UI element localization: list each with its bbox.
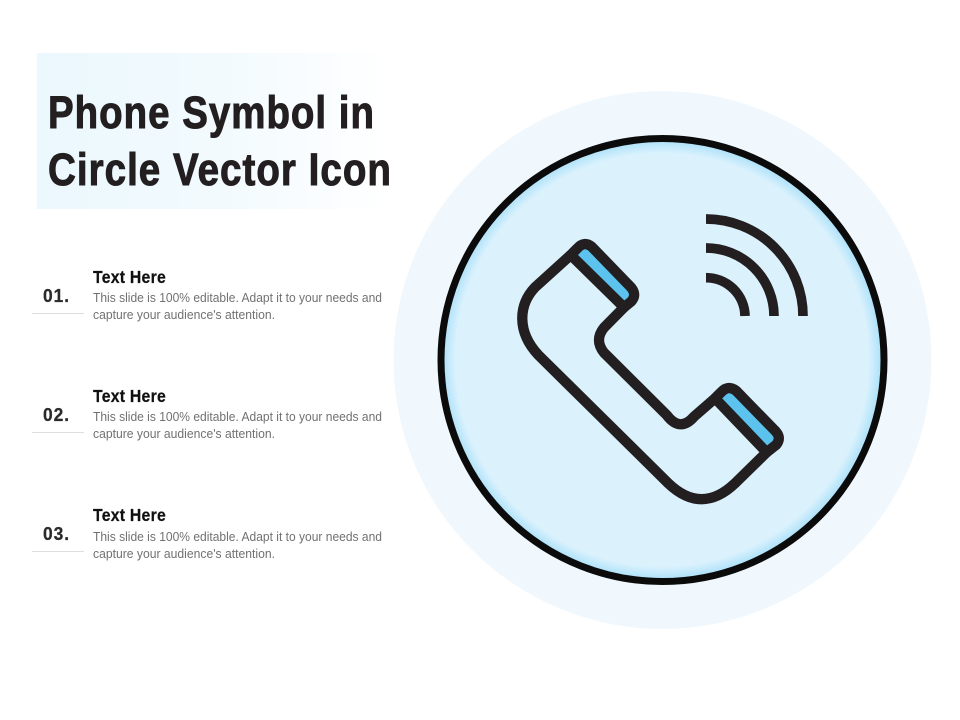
list item 03: Text Here: [93, 505, 166, 525]
icon: phone handset: [522, 244, 779, 499]
list item 03: 03.: [43, 523, 70, 544]
title: Circle Vector Icon: [48, 144, 392, 195]
title: [48, 87, 392, 195]
list item 01: [32, 267, 382, 322]
inner circle with black ring: [441, 138, 884, 582]
list item 02: Text Here: [93, 386, 166, 406]
list item 01: capture your audience's attention.: [93, 307, 275, 322]
list item 02: [32, 386, 382, 441]
title: Phone Symbol in: [48, 87, 375, 138]
list item 03: capture your audience's attention.: [93, 546, 275, 561]
list item 01: This slide is 100% editable. Adapt it to your needs and: [93, 290, 382, 305]
list item 01: Text Here: [93, 267, 166, 287]
earpiece bottom with blue strip: [715, 388, 779, 452]
list item 03: This slide is 100% editable. Adapt it to your needs and: [93, 529, 382, 544]
earpiece top with blue strip: [571, 244, 634, 307]
outer pale circle: [394, 91, 932, 629]
list item 02: This slide is 100% editable. Adapt it to your needs and: [93, 409, 382, 424]
handset outline: [522, 255, 767, 499]
list item 02: 02.: [43, 404, 70, 425]
icon: signal arcs: [706, 219, 803, 316]
list item 01: 01.: [43, 285, 70, 306]
title panel: [37, 53, 392, 209]
list item 03: [32, 505, 382, 561]
list item 02: capture your audience's attention.: [93, 426, 275, 441]
